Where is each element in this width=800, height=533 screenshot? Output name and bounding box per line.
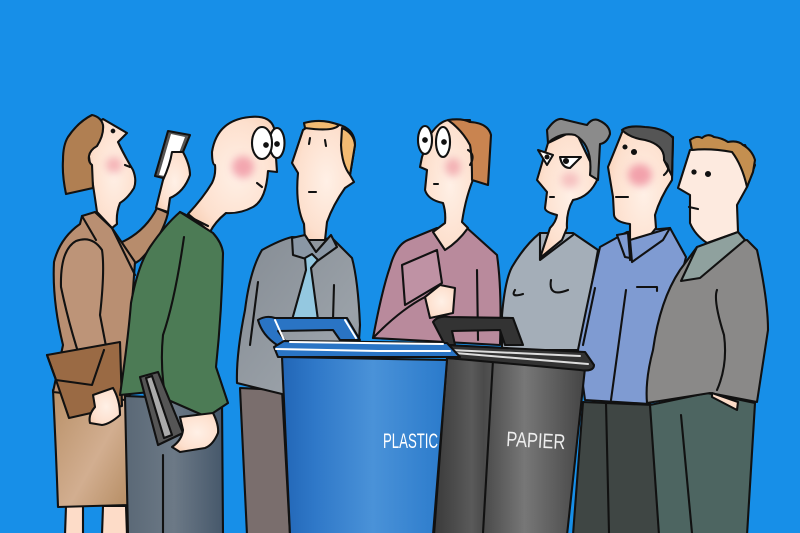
hair [448, 119, 491, 185]
neck and head [188, 117, 277, 232]
collar [681, 232, 745, 281]
person: bald man in green sweater [120, 117, 284, 533]
eyes [418, 126, 432, 154]
eyes and mouth [692, 170, 696, 174]
books [140, 372, 183, 445]
trousers [240, 388, 290, 533]
tie [292, 254, 318, 320]
sweater [120, 212, 228, 417]
person: woman in pink cardigan [373, 119, 501, 345]
folder [402, 250, 442, 305]
label: PAPIER [506, 428, 566, 454]
hand [172, 413, 218, 452]
raised arm [120, 208, 168, 270]
hand in pocket [712, 393, 738, 410]
hair [63, 115, 103, 194]
eyes, ear and mouth [624, 146, 626, 148]
head and neck [88, 119, 135, 228]
trousers [650, 393, 755, 533]
person: man in blue shirt [573, 126, 686, 533]
trousers [573, 402, 662, 533]
handle [258, 317, 360, 345]
face marks [309, 138, 326, 192]
sweater [647, 240, 768, 403]
bin: paper [433, 317, 594, 533]
bag [47, 342, 122, 418]
phone [155, 131, 190, 179]
trousers [125, 396, 223, 533]
collar [292, 235, 337, 262]
shirt [237, 237, 360, 400]
eye and mouth [112, 130, 114, 132]
hand on phone [156, 152, 190, 212]
lid [274, 341, 460, 357]
mouth [550, 196, 554, 198]
shirt [578, 228, 686, 404]
handle [433, 317, 523, 345]
blush [628, 164, 652, 186]
hair [547, 119, 610, 180]
eyes [270, 128, 284, 158]
legs [65, 506, 127, 533]
head [420, 120, 475, 250]
blush [561, 172, 579, 188]
person: man with curly hair [647, 135, 768, 533]
top [502, 233, 598, 350]
blush [445, 158, 461, 176]
body [282, 357, 447, 533]
head [292, 122, 355, 240]
hair [304, 121, 339, 129]
cardigan [373, 228, 501, 345]
sleeve [61, 239, 114, 395]
jacket [53, 212, 135, 400]
person: grey-haired woman with glasses [502, 119, 610, 350]
ear and mouth [434, 150, 473, 184]
label: PLASTIC [383, 430, 438, 453]
collar [617, 228, 670, 262]
skirt [53, 370, 130, 507]
blush [232, 156, 254, 178]
blush [106, 157, 122, 173]
head [678, 145, 755, 243]
hair [622, 126, 673, 176]
hair [690, 135, 755, 187]
head [608, 127, 673, 260]
neckline and chest [514, 233, 573, 295]
bin: plastic [258, 317, 460, 533]
person: woman with phone [47, 115, 190, 533]
lid [446, 345, 594, 370]
head [537, 130, 598, 258]
person: blond man with tie [237, 121, 360, 533]
hand [425, 285, 455, 318]
body [434, 358, 585, 533]
lapel lines [82, 212, 135, 275]
hand on bag [90, 388, 120, 425]
glasses [538, 150, 553, 165]
